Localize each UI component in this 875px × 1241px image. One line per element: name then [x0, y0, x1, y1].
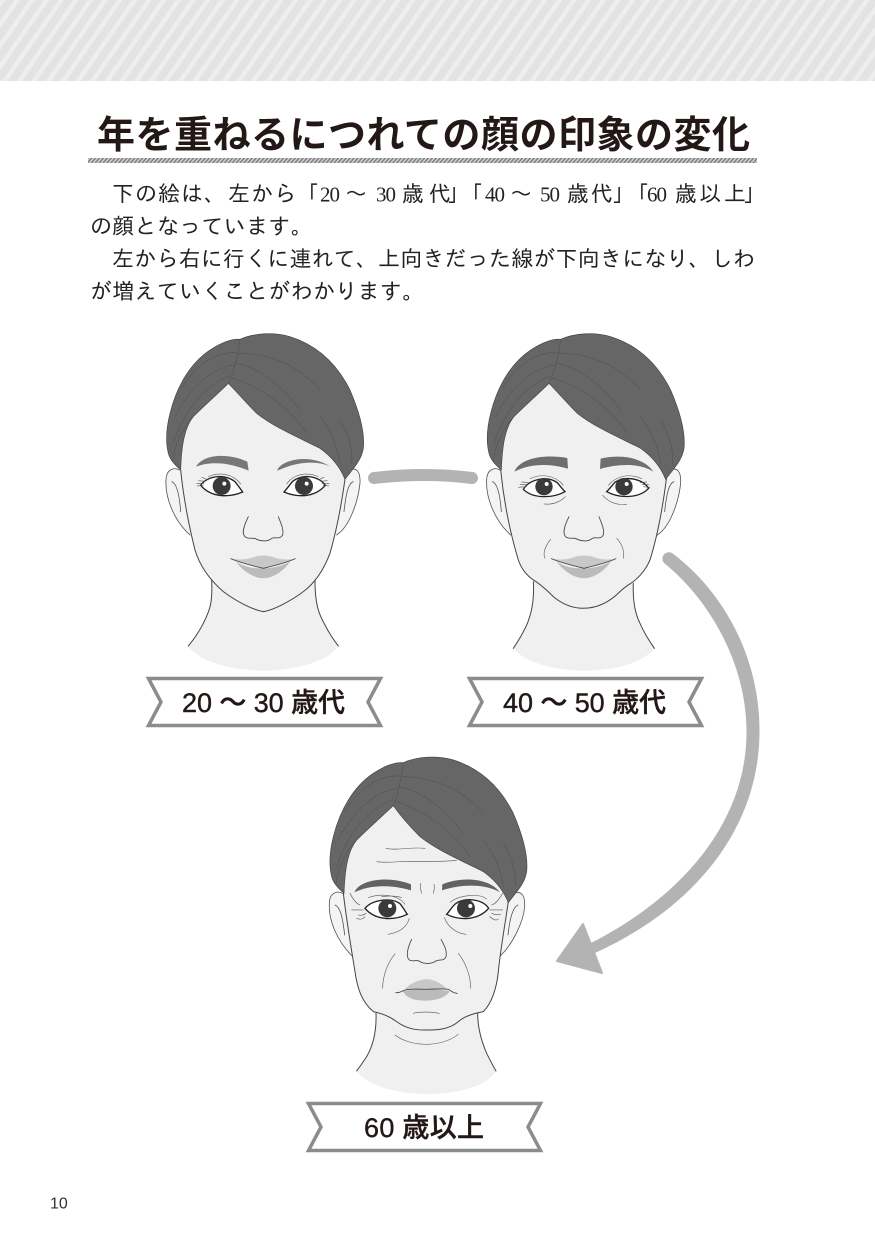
intro text: 20: [320, 182, 340, 206]
intro text: の顔となっています。: [90, 215, 313, 237]
label: 60 and over: 60 歳以上: [364, 1113, 484, 1143]
label: 40 to 50: [470, 678, 702, 726]
intro text: [90, 182, 765, 302]
intro text: が増えていくことがわかります。: [90, 280, 424, 302]
connector arrow bar: [374, 475, 472, 478]
intro text: 30: [376, 182, 396, 206]
intro text: 〜: [510, 182, 532, 204]
label: 40 to 50: 40 ～ 50 歳代: [503, 688, 666, 718]
intro text: 歳代」「: [567, 182, 649, 204]
title: 年を重ねるにつれての顔の印象の変化: [97, 104, 750, 159]
intro text: 下の絵は、左から「: [112, 182, 319, 204]
intro text: 歳代」「: [402, 182, 483, 204]
label: 20 to 30: 20 ～ 30 歳代: [182, 688, 345, 718]
intro text: 左から右に行くに連れて、上向きだった線が下向きになり、しわ: [112, 248, 755, 270]
face: age 60 and over: [329, 757, 527, 1094]
curved arrow: [557, 552, 760, 973]
intro text: 歳以上」: [675, 182, 765, 204]
intro text: 〜: [345, 182, 367, 204]
intro text: 50: [540, 182, 560, 206]
face: age 20 to 30: [166, 334, 364, 671]
intro text: 40: [485, 182, 505, 206]
header stripe band: [0, 0, 875, 81]
face: age 40 to 50: [487, 334, 684, 671]
intro text: 60: [647, 182, 667, 206]
page number: 10: [50, 1196, 68, 1212]
title underline: [88, 158, 757, 163]
label: 60 and over: [308, 1104, 540, 1150]
label: 20 to 30: [148, 678, 380, 726]
